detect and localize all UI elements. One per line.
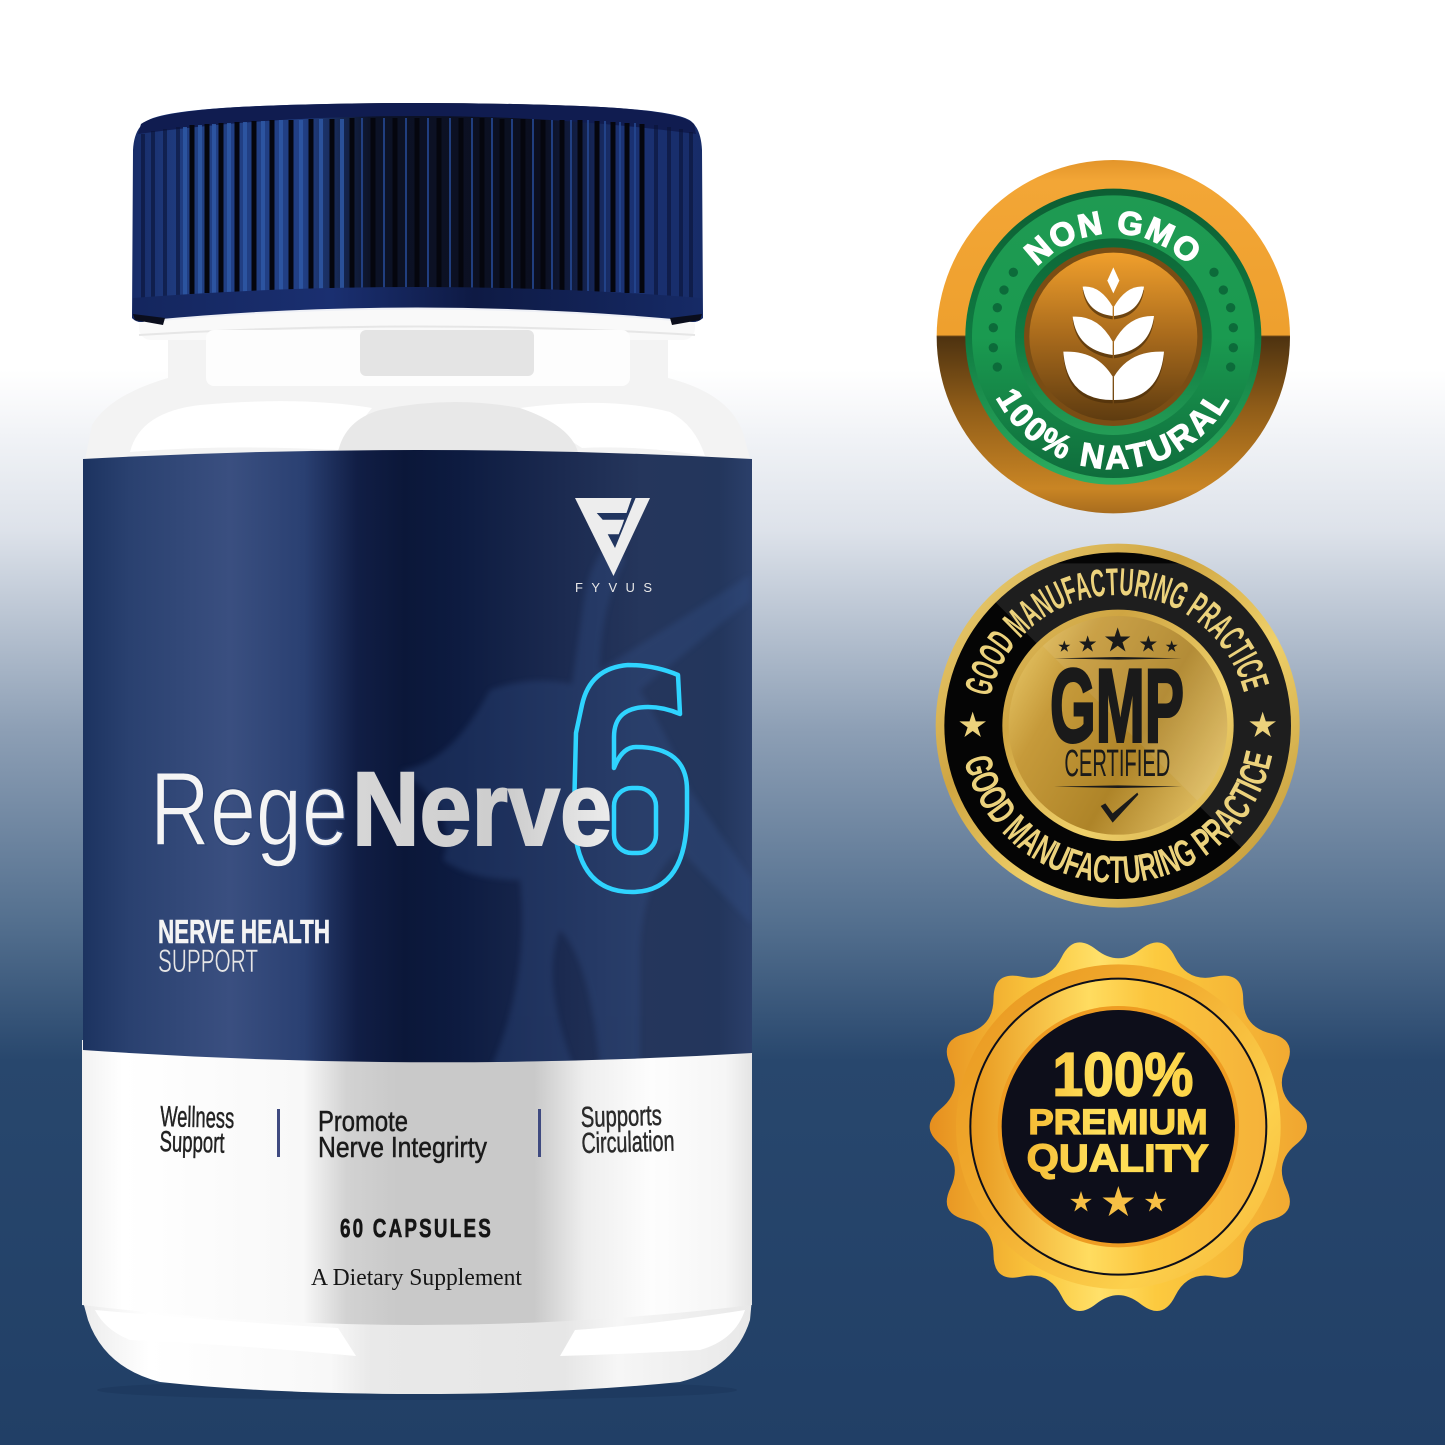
ring text bottom: 100% NATURAL [996, 388, 1230, 470]
benefit: promote nerve integrity: Nerve Integrirty [318, 1132, 487, 1164]
benefit: supports circulation [580, 1100, 675, 1160]
outer gold disc [937, 160, 1290, 513]
tagline: NERVE HEALTH [158, 913, 330, 950]
capsule count: 60 CAPSULES [340, 1213, 493, 1243]
black ring [944, 552, 1303, 899]
gold outer rim [936, 544, 1300, 908]
benefit: wellness support: Wellness [160, 1101, 235, 1135]
ring text bottom: GOOD MANUFACTURING PRACTICE [966, 750, 1272, 883]
bottle bottom shadow [97, 1380, 737, 1400]
outlined number 6 [574, 665, 687, 892]
certified: CERTIFIED [1064, 742, 1170, 784]
dark centre [1002, 1010, 1235, 1243]
bottle cap [132, 103, 703, 325]
premium: PREMIUM [1028, 1103, 1208, 1142]
divider left [277, 1109, 280, 1157]
side stars [959, 712, 1276, 737]
gold rings [956, 964, 1281, 1289]
gold centre disc [1002, 597, 1237, 841]
benefit: promote nerve integrity: Promote [318, 1106, 408, 1138]
product bottle [82, 103, 753, 1400]
badge: gmp certified [936, 544, 1300, 908]
badge: 100% premium quality [930, 942, 1307, 1311]
icon: check mark [1101, 793, 1138, 823]
top stars [1058, 627, 1178, 652]
ring dots [989, 268, 1238, 372]
product name: Rege [150, 751, 348, 868]
stars [1070, 1186, 1166, 1216]
benefit: supports circulation: Circulation [581, 1126, 675, 1160]
green ring [965, 189, 1261, 485]
scalloped seal [930, 942, 1307, 1311]
rib slots [192, 118, 642, 294]
brand name: FYVUS [575, 580, 652, 595]
icon: wheat leaves [1063, 267, 1164, 403]
dark blue label panel [83, 450, 752, 1070]
centre disc [1024, 247, 1203, 426]
benefit: supports circulation: Supports [580, 1100, 662, 1134]
brand logo [575, 497, 652, 595]
base highlights [95, 1310, 745, 1356]
product name: Nerve [352, 751, 612, 868]
divider right [538, 1109, 541, 1157]
ring text top: NON GMO [1022, 210, 1199, 266]
benefit: wellness support [159, 1101, 235, 1160]
neuron artwork [400, 540, 752, 1070]
benefit: promote nerve integrity [318, 1106, 487, 1164]
rule top [1054, 657, 1182, 660]
white label panel [82, 1040, 752, 1325]
ring text top: GOOD MANUFACTURING PRACTICE [966, 568, 1270, 694]
supplement note: A Dietary Supplement [311, 1265, 522, 1291]
tagline: SUPPORT [158, 943, 258, 979]
benefit: wellness support: Support [159, 1126, 225, 1160]
tagline [158, 913, 330, 979]
quality: QUALITY [1027, 1138, 1209, 1181]
gmp heading: GMP [1050, 649, 1184, 765]
100%: 100% [1053, 1041, 1193, 1109]
product name [150, 751, 612, 868]
logo mark [575, 497, 650, 576]
lower bottle base [82, 1298, 752, 1394]
badge: non gmo 100% natural [936, 160, 1290, 514]
outer faint slots [143, 125, 691, 303]
rule bottom [1054, 785, 1182, 788]
bottle neck and shoulder [83, 303, 753, 470]
rib highlights [185, 119, 342, 296]
